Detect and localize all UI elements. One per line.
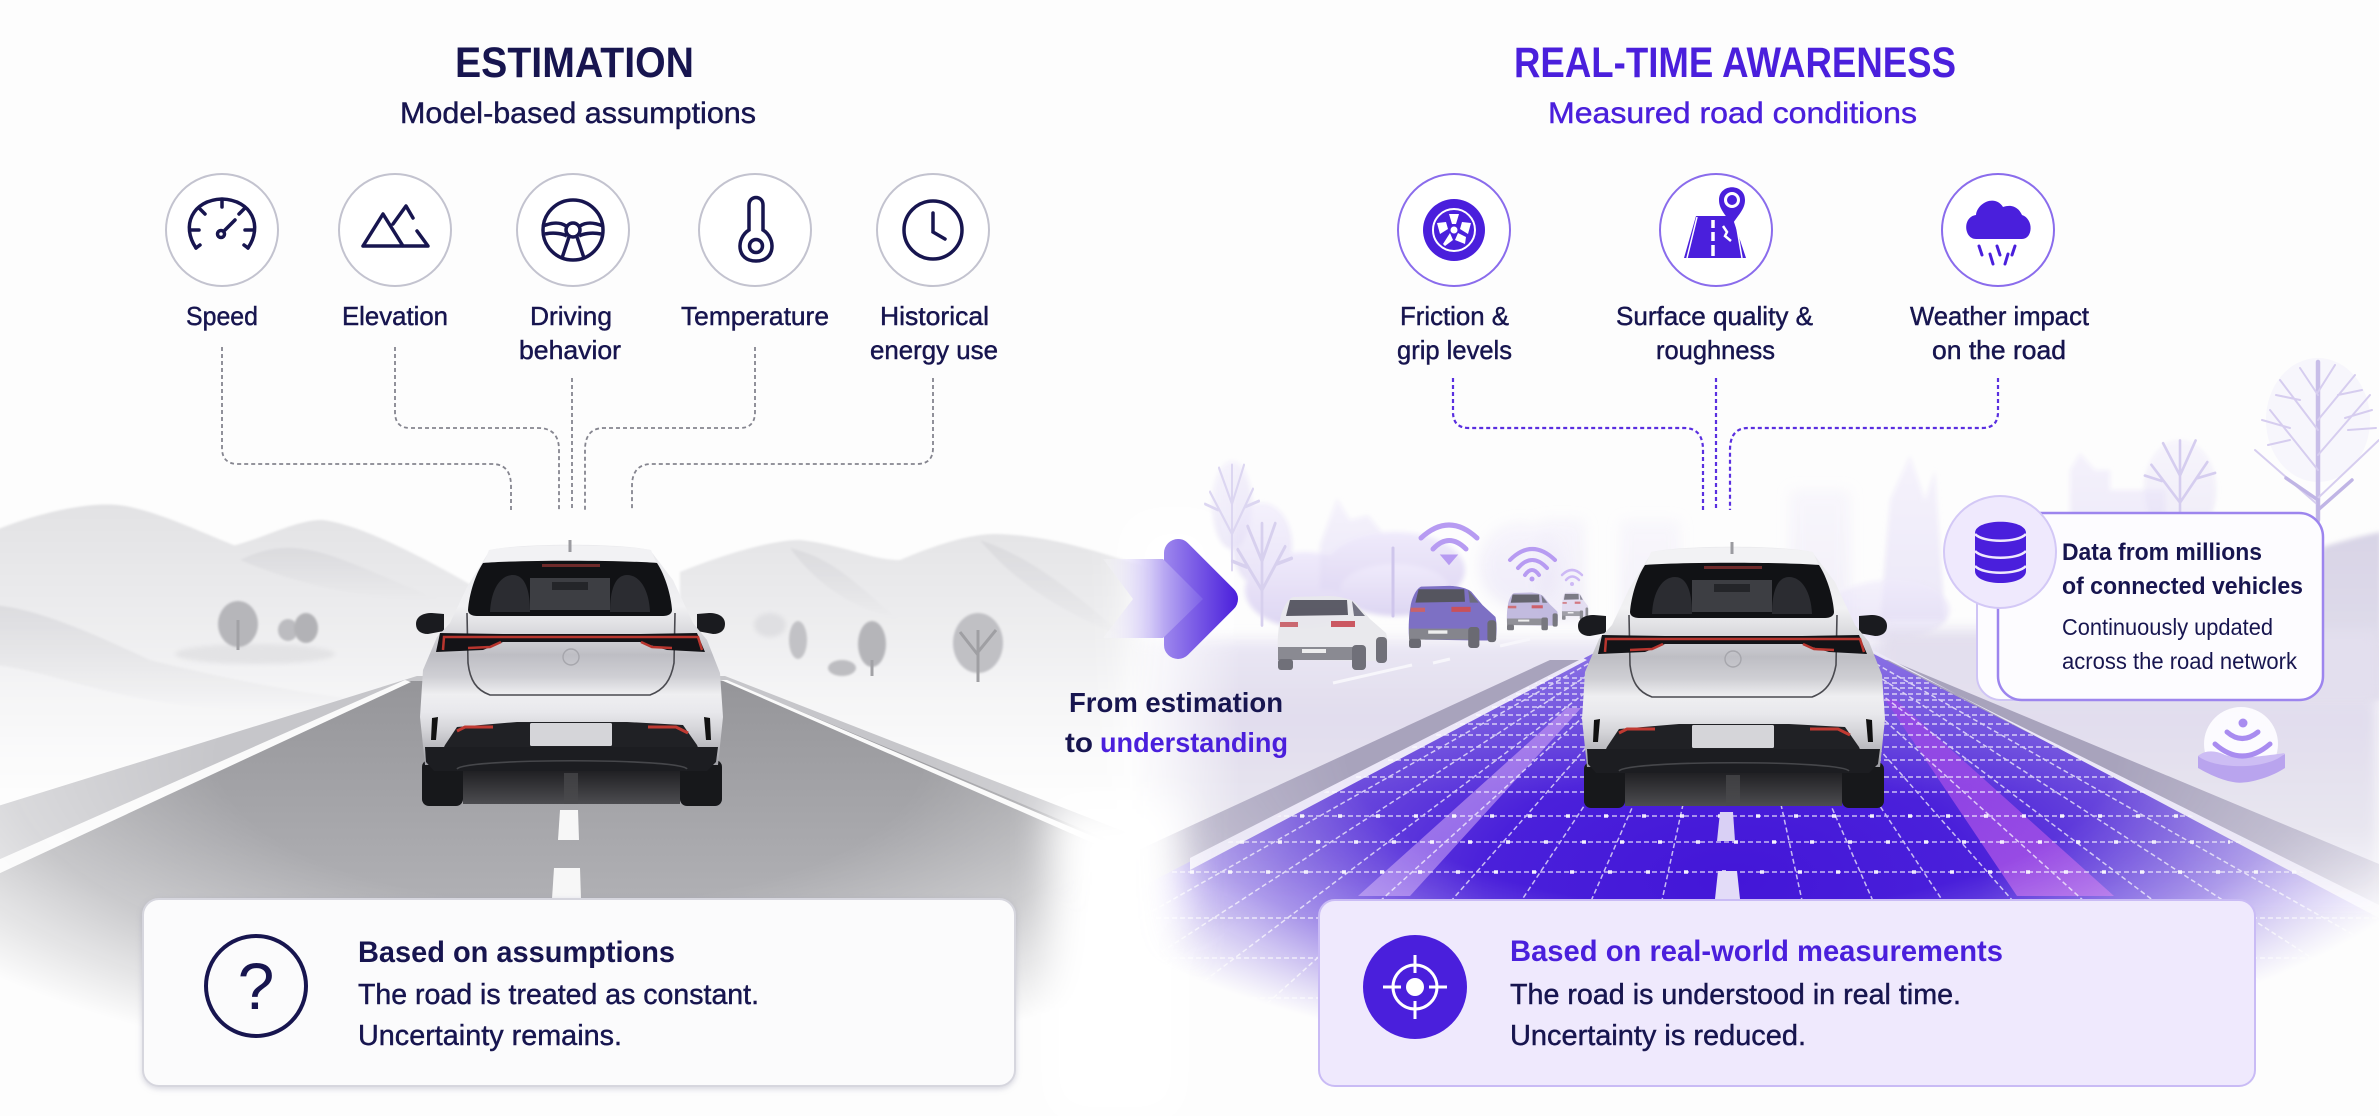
panel heading: Based on real-world measurements <box>1510 935 2003 968</box>
trees left side <box>175 601 1003 682</box>
callout heading <box>2062 539 2303 600</box>
car <box>1578 542 1887 808</box>
icon: target <box>1363 935 1467 1039</box>
callout heading: Data from millions <box>2062 539 2262 566</box>
callout: connected vehicle data <box>1944 496 2323 700</box>
wifi signal icons <box>1421 525 1582 586</box>
arrow <box>1103 553 1224 645</box>
caption: from estimation to understanding <box>1065 687 1288 758</box>
trees right side <box>1205 358 2379 625</box>
panel body text <box>358 979 759 1052</box>
lane dashes left <box>552 810 581 899</box>
labels: estimation inputs: Elevation <box>342 301 448 331</box>
icon: surface quality <box>1660 174 1772 286</box>
labels: estimation inputs: Historical <box>880 301 989 331</box>
caption: from estimation to understanding: understanding <box>1100 727 1288 758</box>
icon: database <box>1975 522 2026 583</box>
icon: elevation <box>339 174 451 286</box>
panel heading: Based on assumptions <box>358 936 675 969</box>
car: purple <box>1409 586 1497 648</box>
panel body text: Uncertainty remains. <box>358 1020 622 1052</box>
labels: real-time inputs: roughness <box>1656 335 1775 365</box>
icon: temperature <box>699 174 811 286</box>
lane dashes right <box>1715 773 1740 899</box>
panel body text: The road is understood in real time. <box>1510 979 1961 1011</box>
labels: real-time inputs: grip levels <box>1397 335 1512 365</box>
labels: real-time inputs: Weather impact <box>1910 301 2090 331</box>
icon: question mark <box>206 936 306 1036</box>
labels: real-time inputs: Friction & <box>1400 301 1509 331</box>
icon: weather impact <box>1942 174 2054 286</box>
subtitle: estimation: Model-based assumptions <box>400 97 756 130</box>
labels: estimation inputs <box>186 301 998 365</box>
icon: question mark: ? <box>238 949 274 1023</box>
subtitle: real-time awareness: Measured road conditions <box>1548 97 1917 130</box>
icon: driving behavior <box>517 174 629 286</box>
connected cars <box>1278 586 1588 683</box>
car: white <box>1278 596 1388 670</box>
caption: from estimation to understanding: to <box>1065 727 1093 758</box>
labels: estimation inputs: energy use <box>870 335 998 365</box>
mist between the two scenes <box>1050 800 1180 1116</box>
labels: real-time inputs <box>1397 301 2090 365</box>
panel body text <box>1510 979 1961 1052</box>
connectors: estimation inputs <box>222 347 933 510</box>
panel body text: Uncertainty is reduced. <box>1510 1020 1806 1052</box>
caption: from estimation to understanding: From estimation <box>1069 687 1283 718</box>
icon: speed <box>166 174 278 286</box>
road left <box>0 676 1086 1010</box>
callout body <box>2062 614 2297 674</box>
icon: road sensor beacon <box>2198 707 2285 783</box>
panel: based on assumptions <box>143 899 1015 1086</box>
car: distant 2 <box>1507 593 1558 630</box>
callout heading: of connected vehicles <box>2062 573 2303 600</box>
scene: lavender skyline <box>1158 444 2379 868</box>
title: real-time awareness: REAL-TIME AWARENESS <box>1514 39 1956 87</box>
labels: real-time inputs: on the road <box>1932 335 2066 365</box>
mist beside arrow <box>1130 520 1220 940</box>
connectors: real-time inputs <box>1453 378 1998 510</box>
labels: estimation inputs: Driving <box>530 301 612 331</box>
labels: estimation inputs: Temperature <box>681 301 829 331</box>
labels: estimation inputs: Speed <box>186 301 258 331</box>
car <box>416 540 725 806</box>
panel body text: The road is treated as constant. <box>358 979 759 1011</box>
callout body: Continuously updated <box>2062 614 2273 640</box>
scene: misty hills <box>0 504 1190 790</box>
labels: estimation inputs: behavior <box>519 335 621 365</box>
road right with data grid <box>1162 654 2379 1012</box>
labels: real-time inputs: Surface quality & <box>1616 301 1813 331</box>
panel: based on real-world measurements <box>1319 900 2255 1086</box>
icon: historical energy use <box>877 174 989 286</box>
icon: friction <box>1398 174 1510 286</box>
car: distant 3 <box>1562 592 1588 620</box>
callout body: across the road network <box>2062 648 2297 674</box>
title: estimation: ESTIMATION <box>455 39 694 87</box>
